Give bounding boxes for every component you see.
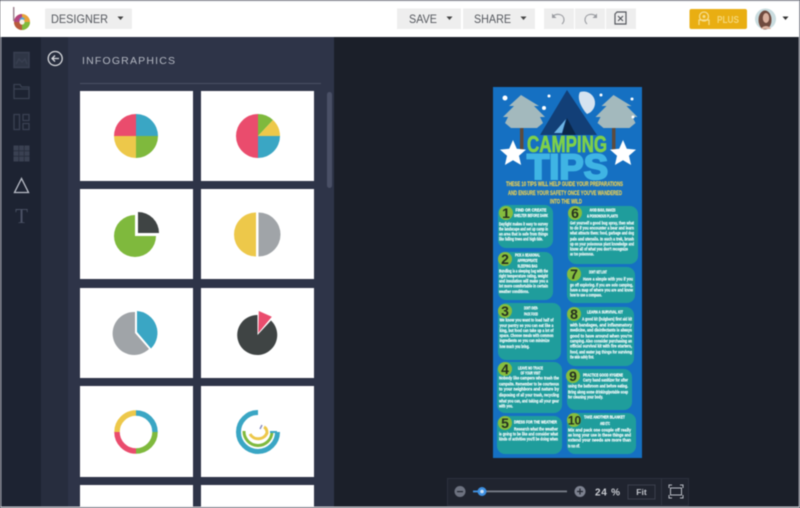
- tip 3: king, but food can take up a lot of: [500, 328, 554, 333]
- tip 2: Bundling is a sleeping bag with the: [499, 268, 548, 274]
- icon: folder: [14, 84, 29, 98]
- tip 1: the landscape and set up camp in: [499, 226, 548, 232]
- tip 7: DON'T GET LOST: [589, 270, 607, 274]
- tip 2: right temperature rating, weight: [499, 274, 548, 278]
- share button: SHARE: [474, 12, 511, 26]
- card: mixed pie: [201, 91, 314, 181]
- tip 10: 10: [568, 414, 581, 428]
- icon: moon: [579, 91, 595, 114]
- tip 6: to do if you encounter a bear and learn: [570, 226, 634, 230]
- title: camping: CAMPING: [527, 131, 607, 157]
- tip 4: with you.: [498, 404, 513, 408]
- tip 9: [566, 368, 632, 410]
- tip 5: 5: [501, 415, 509, 431]
- tip 4: what you can, and taking all your gear: [498, 398, 559, 404]
- tip 8: the wide safely first.: [570, 354, 594, 360]
- tip 5: DRESS FOR THE WEATHER: [514, 420, 558, 424]
- top toolbar: [0, 0, 800, 37]
- icon: left pine tree: [503, 95, 545, 150]
- fit button: Fit: [636, 487, 647, 497]
- tip 8: A good kit (bulgbars) first aid kit: [582, 316, 632, 322]
- tip 8: good to have around when you're: [570, 334, 633, 338]
- tip 10: Mix and pack one couple off really: [568, 428, 632, 432]
- intro text: THESE 10 TIPS WILL HELP GUIDE YOUR PREPARATIONS: [506, 182, 623, 188]
- tip 6: as too poisonous.: [570, 252, 594, 256]
- tip 6: [568, 205, 638, 264]
- tip 2: [498, 251, 553, 300]
- tip 8: 8: [570, 306, 578, 322]
- tip 1: like falling trees and high tide.: [499, 236, 543, 242]
- tip 6: know all of what you don't recognize: [570, 246, 629, 252]
- panel: infographics library: [68, 37, 334, 508]
- tip 6: AVOID BUGS, SNAKES: [590, 208, 616, 212]
- tip 3: PACK FOOD: [524, 312, 538, 316]
- cards: next row, cropped: [80, 485, 314, 508]
- tip 2: PICK A SEASONAL: [515, 252, 540, 258]
- tip 4: disposing of all your trash, recycling: [499, 392, 559, 398]
- icon: layout: [14, 114, 29, 130]
- tip 3: We know you want to load half of: [500, 318, 554, 322]
- plus upgrade button: PLUS: [717, 15, 739, 26]
- tip 5: kinds of activities you'll be doing when: [499, 436, 558, 442]
- tip 2: SLEEPING BAG: [518, 264, 538, 268]
- tip 3: [498, 303, 561, 360]
- tip 4: to your neighbors and nature by: [499, 386, 560, 392]
- tip 10: AND ETC: [600, 421, 610, 426]
- tip 1: [498, 205, 553, 248]
- card: dark pie with pink slice: [201, 288, 314, 378]
- icon: left star: [500, 140, 526, 165]
- tip 7: have a map of where you are and know: [570, 288, 634, 292]
- tip 2: lot more comfortable in certain: [499, 284, 548, 288]
- tip 10: as long your use in these things and: [568, 432, 631, 438]
- tip 8: LEARN A SURVIVAL KIT: [587, 310, 623, 314]
- tip 4: campsite. Remember to be courteous: [499, 382, 560, 386]
- tip 8: medicine, and disinfectants is always: [570, 328, 633, 332]
- save button: SAVE: [409, 12, 437, 26]
- tip 1: 1: [502, 205, 510, 221]
- tip 8: food, and water jug things for survivng: [570, 350, 632, 354]
- tip 2: and insulation will make you a: [499, 278, 549, 284]
- card: donut chart: [80, 386, 193, 477]
- tip 2: APPROPRIATE: [518, 258, 538, 263]
- tip 1: an area that is safe from things: [499, 232, 549, 236]
- card: grey and blue pie: [80, 288, 193, 378]
- tip 7: go off exploring. If you are solo camping,: [570, 282, 633, 288]
- tip 1: SHELTER BEFORE DARK: [514, 213, 549, 218]
- tip 3: 3: [501, 303, 509, 319]
- card: half yellow half grey pie: [201, 189, 314, 279]
- undo, redo and clear buttons: [544, 8, 636, 29]
- tip 8: camping. Also consider purchasing an: [570, 338, 632, 344]
- tip 4: OF YOUR VISIT: [520, 370, 541, 376]
- tip 8: official survival kit with fire starters,: [570, 344, 632, 348]
- icon: image: [14, 52, 29, 68]
- zoom out button: [454, 486, 466, 497]
- tip 7: how to use a compass.: [570, 292, 602, 298]
- tip 4: LEAVE NO TRACE: [518, 366, 543, 370]
- designer menu button: [45, 8, 132, 29]
- tip 2: weather conditions.: [498, 289, 529, 294]
- zoom percentage: 24 %: [595, 488, 620, 498]
- tip 3: your pantry so you can eat like a: [500, 323, 554, 328]
- tip 6: pals and utensils. In such a trek, brush: [570, 236, 634, 242]
- icon: fullscreen: [669, 485, 683, 498]
- tip 2: 2: [501, 251, 509, 267]
- intro text: INTO THE WILD: [550, 200, 582, 206]
- tip 9: using the bathroom and before eating.: [568, 384, 628, 388]
- tip 8: [567, 306, 634, 366]
- save button: [397, 8, 461, 29]
- tip 10: TAKE ANOTHER BLANKET: [584, 414, 625, 420]
- tip 10: to run off.: [568, 444, 580, 448]
- tip 9: for cleaning your body.: [568, 394, 603, 400]
- panel heading: INFOGRAPHICS: [82, 55, 175, 67]
- tip 3: ingredients so you can minimize: [500, 338, 550, 343]
- icon: grid: [14, 146, 30, 162]
- tip 5: [497, 415, 562, 454]
- tip 3: DON'T OVER-: [524, 306, 538, 310]
- tip 7: [567, 266, 635, 303]
- tip 8: with bandages, and inflammatory: [569, 322, 633, 328]
- tip 6: up on your poisonous plant knowledge and: [570, 242, 634, 246]
- tip 4: Nobody like campers who trash the: [499, 376, 560, 380]
- left icon rail: [0, 37, 41, 508]
- zoom control bar: [448, 478, 688, 506]
- tip 4: 4: [501, 361, 509, 377]
- intro text: [506, 182, 623, 206]
- card: four quadrant pie: [80, 91, 193, 181]
- card: radial arcs chart: [201, 386, 314, 477]
- tip 6: what attracts them: food, garbage and dog: [569, 230, 634, 236]
- fit button: [628, 485, 655, 499]
- tip 10: [567, 413, 636, 454]
- tip 6: 6: [571, 205, 579, 221]
- card: green pie with dark slice: [80, 189, 193, 279]
- tip 5: is going to be like and consider what: [499, 432, 558, 436]
- icon: back arrow: [48, 52, 62, 66]
- tip 5: Research what the weather: [514, 426, 558, 432]
- icon: tent: [540, 90, 597, 135]
- zoom in button: [574, 486, 586, 497]
- tip 1: Daylight makes it easy to survey: [499, 222, 548, 226]
- tip 9: Carry hand sanitizer for after: [583, 378, 628, 382]
- user avatar: [755, 8, 788, 30]
- plus upgrade button: [690, 9, 747, 29]
- icon: triangle: [14, 178, 28, 192]
- intro text: AND ENSURE YOUR SAFETY ONCE YOU'VE WANDERED: [508, 191, 622, 197]
- tip 10: extend your needs are more than: [568, 438, 631, 442]
- tip 6: & POISONOUS PLANTS: [587, 214, 618, 218]
- title: tips: TIPS: [527, 148, 608, 187]
- tip 3: how much you bring.: [500, 344, 530, 349]
- tip 7: 7: [570, 266, 578, 282]
- tip 6: Get yourself a good bug spray, then what: [570, 220, 634, 226]
- designer menu button: DESIGNER: [51, 12, 108, 26]
- share button: [463, 8, 535, 29]
- icon: right star: [610, 140, 636, 165]
- tip 9: 9: [569, 368, 577, 384]
- icon: text: T: [15, 204, 28, 228]
- icon: right pine tree: [596, 95, 638, 150]
- zoom slider: [473, 487, 567, 496]
- tip 9: Bring along some drinking/potable soap: [568, 390, 628, 394]
- decorative stars: [502, 94, 634, 118]
- canvas: camping tips infographic: [493, 87, 642, 458]
- tip 4: [497, 361, 562, 413]
- back column: [41, 37, 68, 508]
- scrollbar: [327, 92, 332, 188]
- tip 9: PRACTICE GOOD HYGIENE: [583, 372, 623, 378]
- tip 7: Have a simple with you if you: [583, 276, 633, 282]
- tip 3: space. Choose meals with common: [500, 333, 554, 338]
- logo: [13, 7, 30, 30]
- tip 1: FIND OR CREATE: [516, 208, 547, 212]
